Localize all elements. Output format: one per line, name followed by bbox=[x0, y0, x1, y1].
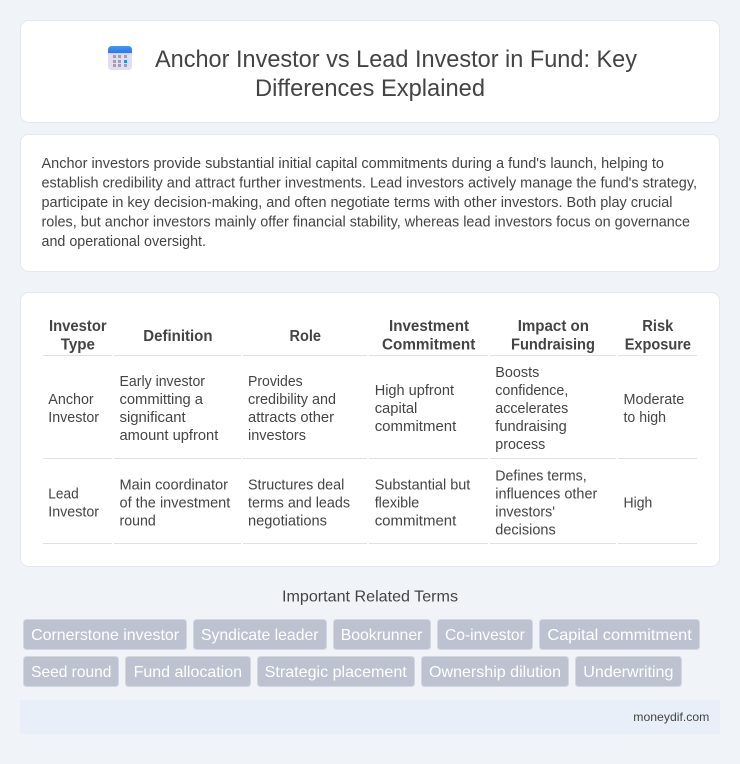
table row: anchor investor: accelerates bbox=[495, 400, 568, 417]
tag: strategic placement bbox=[258, 656, 414, 686]
footer site name: moneydif.com bbox=[633, 710, 709, 724]
table header row: Investor bbox=[49, 318, 107, 335]
table row: anchor investor: commitment bbox=[375, 418, 457, 435]
table row: anchor investor: Anchor bbox=[48, 391, 94, 408]
table row: lead investor: Defines terms, bbox=[495, 467, 587, 484]
table row: anchor investor: credibility and bbox=[248, 391, 336, 408]
table row: lead investor: commitment bbox=[375, 512, 457, 529]
table header row: Type bbox=[61, 336, 95, 354]
table header row: Exposure bbox=[625, 336, 691, 354]
tag: fund allocation: Fund allocation bbox=[134, 664, 242, 681]
panel: header bbox=[20, 20, 720, 122]
icon: calendar bbox=[108, 46, 132, 70]
table row: lead investor: negotiations bbox=[248, 512, 327, 529]
table row: anchor investor: Early investor bbox=[120, 373, 205, 390]
table row: anchor investor: process bbox=[495, 436, 545, 453]
tag: underwriting: Underwriting bbox=[583, 664, 673, 681]
tag: capital commitment bbox=[540, 620, 700, 650]
table row: lead investor: Investor bbox=[48, 503, 99, 520]
tag: syndicate leader bbox=[194, 620, 326, 650]
table row: lead investor: Main coordinator bbox=[120, 476, 228, 493]
tag: fund allocation bbox=[126, 656, 250, 686]
title: Anchor Investor vs Lead Investor in Fund: Key bbox=[155, 46, 637, 73]
tag: bookrunner bbox=[334, 620, 430, 650]
table row: lead investor: flexible bbox=[375, 494, 419, 511]
table row: lead investor: influences other bbox=[495, 485, 597, 502]
table row: anchor investor: to high bbox=[624, 409, 666, 426]
table header row: Fundraising bbox=[511, 336, 595, 354]
tag: cornerstone investor bbox=[24, 620, 186, 650]
table header row: Definition bbox=[143, 328, 212, 345]
table header row bbox=[49, 318, 691, 354]
table row: lead investor: Structures deal bbox=[248, 476, 344, 493]
tag: co-investor: Co-investor bbox=[445, 627, 525, 644]
table row: lead investor: High bbox=[624, 494, 652, 511]
tag: co-investor bbox=[438, 620, 532, 650]
table header row: Impact on bbox=[518, 318, 589, 335]
intro text block: roles, but anchor investors mainly offer financial stability, whereas lead investors focus on governance bbox=[42, 214, 690, 230]
tag: strategic placement: Strategic placement bbox=[265, 664, 407, 681]
tag: ownership dilution bbox=[422, 656, 568, 686]
table row: lead investor: round bbox=[120, 512, 156, 529]
tag: ownership dilution: Ownership dilution bbox=[429, 664, 561, 681]
table header row: Commitment bbox=[382, 336, 476, 354]
table row: lead investor: decisions bbox=[495, 521, 556, 538]
table row: lead investor bbox=[48, 467, 652, 538]
table row: anchor investor: amount upfront bbox=[120, 427, 219, 444]
tag: syndicate leader: Syndicate leader bbox=[201, 627, 319, 644]
table row: anchor investor: Investor bbox=[48, 409, 99, 426]
intro text block: and operational oversight. bbox=[42, 233, 206, 250]
table row: lead investor: of the investment bbox=[120, 494, 231, 511]
tag: seed round bbox=[24, 656, 118, 686]
tag list: related terms bbox=[24, 620, 700, 686]
table row: anchor investor: Boosts bbox=[495, 364, 539, 381]
tag: seed round: Seed round bbox=[31, 664, 111, 681]
table header row: Role bbox=[290, 328, 321, 345]
table row: anchor investor: fundraising bbox=[495, 418, 567, 435]
title: Differences Explained bbox=[255, 75, 485, 102]
tag: cornerstone investor: Cornerstone investor bbox=[31, 627, 180, 644]
intro text block: establish credibility and attract further investments. Lead investors actively manage the fund's strategy, bbox=[42, 174, 697, 192]
intro text block: Anchor investors provide substantial initial capital commitments during a fund's launch, helping to bbox=[42, 155, 664, 172]
table row: anchor investor: capital bbox=[375, 400, 417, 417]
heading: important related terms: Important Related Terms bbox=[282, 588, 458, 606]
table row: anchor investor: confidence, bbox=[495, 382, 568, 399]
table row: anchor investor: Moderate bbox=[624, 391, 684, 408]
table header row: Investment bbox=[389, 318, 470, 335]
table row: anchor investor: investors bbox=[248, 427, 306, 444]
intro text block: participate in key decision-making, and often negotiate terms with other investors. Both play crucial bbox=[42, 194, 672, 211]
table row: anchor investor: Provides bbox=[248, 373, 303, 390]
tag: bookrunner: Bookrunner bbox=[341, 627, 423, 644]
table row: lead investor: terms and leads bbox=[248, 494, 350, 511]
intro text block bbox=[42, 155, 697, 250]
table row: lead investor: investors' bbox=[495, 503, 555, 520]
title bbox=[155, 46, 637, 102]
footer bar bbox=[20, 700, 720, 734]
table row: anchor investor bbox=[48, 364, 684, 453]
tag: capital commitment: Capital commitment bbox=[547, 627, 692, 644]
table row: anchor investor: committing a bbox=[120, 391, 204, 408]
table row: lead investor: Lead bbox=[48, 485, 79, 502]
table row: anchor investor: High upfront bbox=[375, 382, 455, 399]
panel: comparison table bbox=[20, 292, 720, 566]
table row: anchor investor: significant bbox=[120, 409, 187, 426]
table row: lead investor: Substantial but bbox=[375, 476, 471, 493]
panel: intro bbox=[20, 134, 720, 272]
table row: anchor investor: attracts other bbox=[248, 409, 334, 426]
tag: underwriting bbox=[576, 656, 682, 686]
table header row: Risk bbox=[642, 318, 673, 335]
